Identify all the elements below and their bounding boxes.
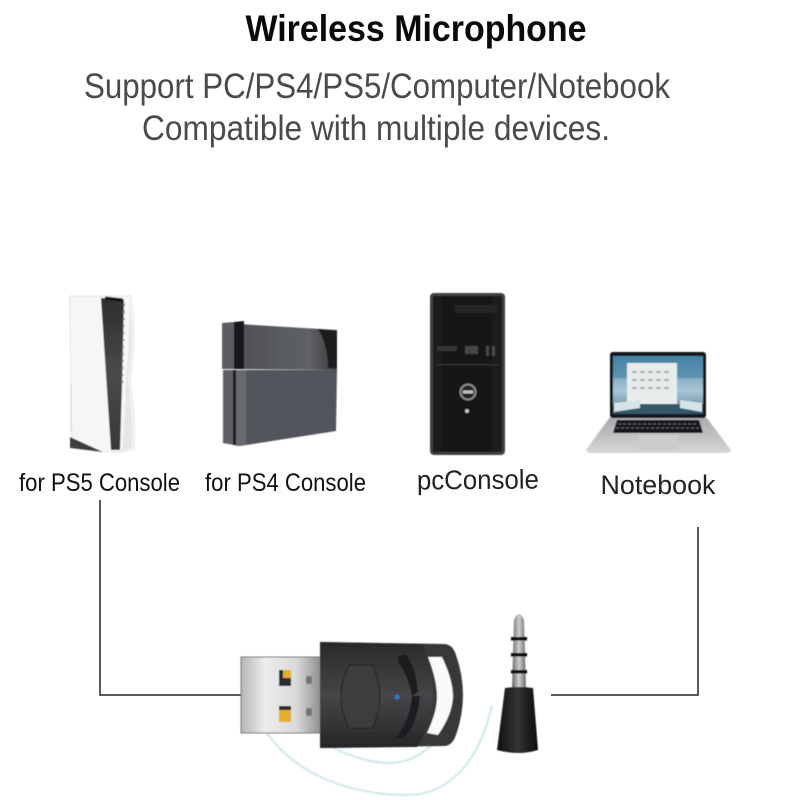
icon: PS4 console [222, 321, 337, 446]
dongle body [320, 642, 463, 748]
title: Wireless Microphone [246, 8, 586, 49]
device labels [19, 464, 716, 500]
subtitle text block: Compatible with multiple devices. [142, 109, 610, 148]
dongle window [427, 657, 453, 735]
subtitle text block: Support PC/PS4/PS5/Computer/Notebook [84, 67, 670, 106]
label: PS5: for PS5 Console [19, 469, 180, 497]
wireless signal arcs [267, 705, 492, 795]
connector line: PS5 to USB [100, 500, 241, 695]
label: notebook: Notebook [600, 470, 716, 500]
dongle hexagon [341, 665, 380, 728]
USB plug [241, 657, 321, 733]
icon: PS5 console [70, 296, 134, 452]
label: PC: pcConsole [417, 464, 539, 496]
subtitle text block [84, 67, 670, 148]
LED [394, 694, 400, 700]
icon: notebook [586, 352, 731, 453]
connector line: notebook to jack [551, 527, 698, 695]
icon: PC tower [430, 293, 505, 455]
USB dongle [241, 642, 463, 748]
label: PS4: for PS4 Console [205, 469, 366, 497]
3.5mm jack [497, 614, 538, 753]
